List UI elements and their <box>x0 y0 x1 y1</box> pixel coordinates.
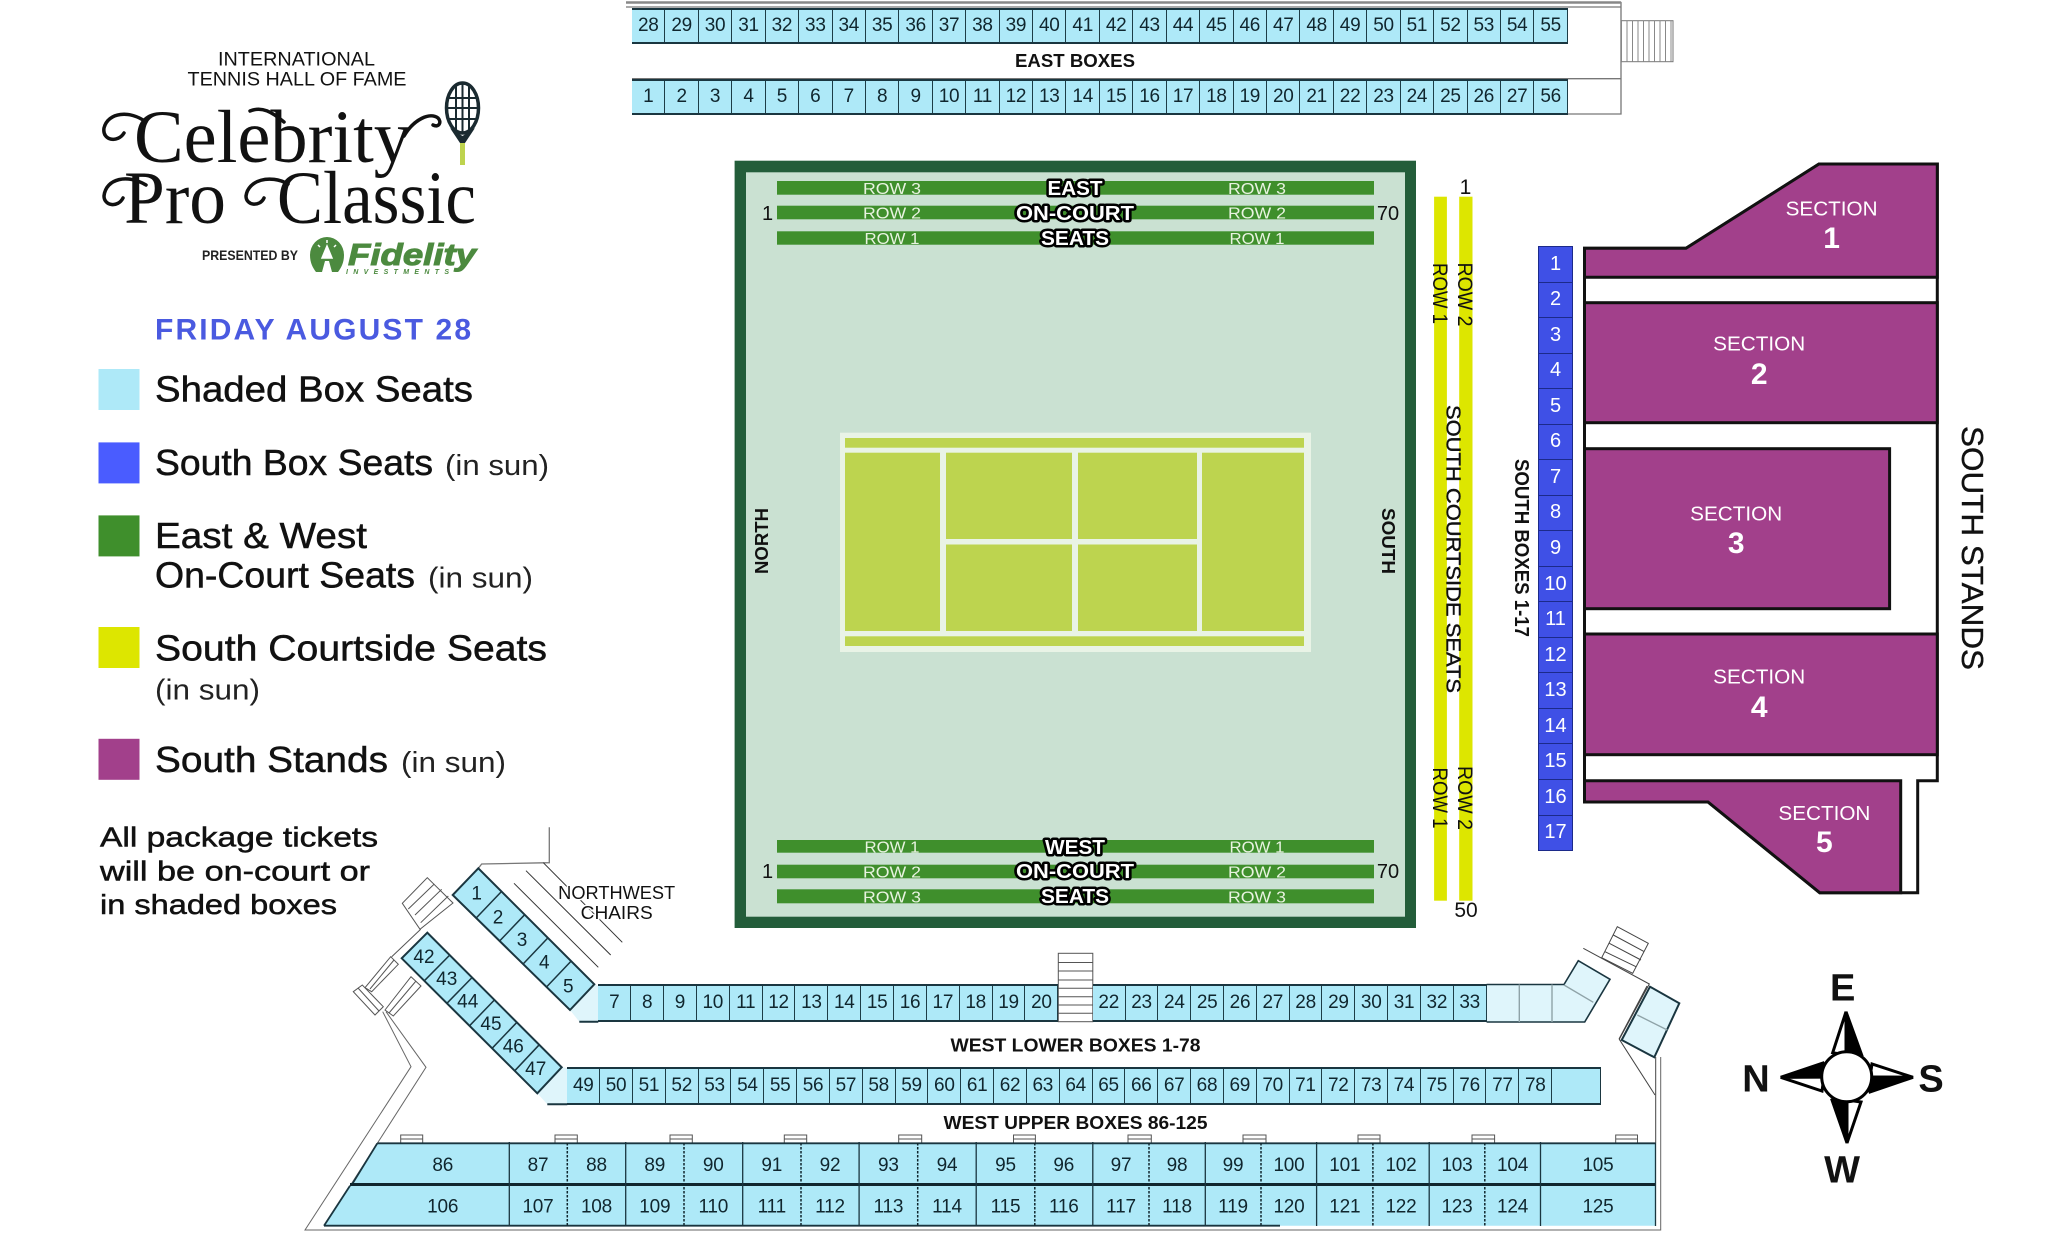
note: package tickets: All package tickets <box>100 822 378 853</box>
east boxes row 1-27 and 56: 4 <box>743 86 754 107</box>
west lower boxes 49-78: 60 <box>934 1075 955 1096</box>
east boxes row 1-27 and 56: 14 <box>1072 86 1093 107</box>
panel: south stands: 2 <box>1751 358 1768 391</box>
west upper boxes 86-125: 121 <box>1329 1196 1360 1218</box>
northwest chairs lines and label <box>478 827 675 967</box>
legend: south courtside seats: (in sun) <box>155 675 260 707</box>
diagonal boxes 42-47 <box>402 933 567 1104</box>
logo: presented by Fidelity <box>202 237 478 276</box>
west upper boxes 86-125: 92 <box>820 1155 840 1176</box>
east boxes row 1-27 and 56: 12 <box>1006 86 1026 107</box>
east boxes row 1-27 and 56: 11 <box>973 86 992 107</box>
south boxes column 1-17: 6 <box>1550 430 1561 452</box>
south boxes column 1-17: 17 <box>1544 821 1567 843</box>
south boxes column 1-17: 12 <box>1544 644 1567 666</box>
east boxes row 1-27 and 56: 25 <box>1440 86 1461 107</box>
west upper boxes 86-125: 125 <box>1582 1196 1614 1218</box>
east boxes row 1-27 and 56: 13 <box>1039 86 1060 107</box>
panel: south stands: 3 <box>1728 527 1745 560</box>
diagonal boxes 1-5: 5 <box>563 976 574 998</box>
west upper boxes 86-125: 105 <box>1582 1155 1614 1176</box>
west lower boxes 22-33: 22 <box>1098 992 1119 1013</box>
east boxes row 1-27 and 56: 8 <box>877 86 887 107</box>
west lower boxes 22-33: 25 <box>1197 992 1217 1013</box>
west upper boxes 86-125: 86 <box>432 1155 453 1176</box>
compass rose: N <box>1742 1059 1770 1101</box>
west lower boxes 7-20: 13 <box>801 992 822 1013</box>
label: west upper boxes: WEST UPPER BOXES 86-125 <box>944 1113 1208 1133</box>
south boxes column 1-17: 15 <box>1544 750 1567 772</box>
west upper boxes 86-125: 104 <box>1497 1155 1529 1176</box>
northwest chairs lines and label: CHAIRS <box>581 903 653 923</box>
west lower boxes 7-20: 10 <box>703 992 723 1013</box>
west lower boxes 49-78: 77 <box>1492 1075 1513 1096</box>
west lower boxes 49-78: 61 <box>967 1075 987 1096</box>
east boxes row 1-27 and 56: 56 <box>1540 86 1561 107</box>
east boxes row 28-55: 39 <box>1006 15 1026 36</box>
west upper boxes 86-125: 119 <box>1218 1196 1248 1218</box>
west upper boxes 86-125: 116 <box>1049 1196 1079 1218</box>
east boxes row 28-55: 28 <box>638 15 658 36</box>
west lower boxes 49-78: 65 <box>1098 1075 1119 1096</box>
west lower boxes 49-78 <box>567 1067 1552 1105</box>
east on-court rows: ROW 2 <box>863 206 921 223</box>
logo: presented by Fidelity: Fidelity <box>348 237 478 272</box>
panel: south courtside seats: ROW 2 <box>1453 766 1476 830</box>
logo: Celebrity Pro Classic: TENNIS HALL OF FAME <box>188 70 406 91</box>
logo: Celebrity Pro Classic: Classic <box>277 157 476 240</box>
compass rose: W <box>1824 1150 1860 1192</box>
west upper boxes 86-125: 115 <box>991 1196 1020 1218</box>
west lower boxes 49-78: 64 <box>1065 1075 1086 1096</box>
logo: presented by Fidelity: INVESTMENTS <box>346 269 449 276</box>
panel: south stands: 5 <box>1816 826 1833 859</box>
panel: south stands: SECTION <box>1778 803 1870 825</box>
west lower boxes 22-33: 31 <box>1394 992 1414 1013</box>
panel: south stands: 4 <box>1751 691 1768 724</box>
east boxes enclosure and stairs <box>626 2 1673 114</box>
west upper boxes 86-125: 117 <box>1106 1196 1136 1218</box>
west lower boxes 22-33: 33 <box>1459 992 1480 1013</box>
west upper boxes 86-125: 112 <box>815 1196 845 1218</box>
west upper boxes 86-125: 88 <box>586 1155 607 1176</box>
east boxes row 1-27 and 56: 20 <box>1273 86 1294 107</box>
panel: south stands: SECTION <box>1690 504 1782 526</box>
west upper boxes 86-125: 118 <box>1162 1196 1192 1218</box>
east on-court rows <box>762 178 1399 250</box>
east on-court rows: 1 <box>762 203 773 225</box>
east boxes row 28-55: 42 <box>1106 15 1126 36</box>
west upper boxes 86-125: 111 <box>758 1196 786 1218</box>
west lower boxes 49-78: 71 <box>1295 1075 1316 1096</box>
west upper boxes 86-125: 100 <box>1273 1155 1305 1176</box>
legend: south box seats <box>98 442 549 483</box>
west lower boxes 7-20: 16 <box>900 992 920 1013</box>
legend: south box seats: (in sun) <box>445 450 549 482</box>
south boxes column 1-17: 4 <box>1550 359 1561 381</box>
east boxes row 28-55: 36 <box>905 15 926 36</box>
legend: east and west on-court seats: (in sun) <box>428 563 533 595</box>
west upper boxes 86-125: 110 <box>698 1196 728 1218</box>
east boxes row 1-27 and 56: 10 <box>939 86 959 107</box>
west lower boxes 49-78: 63 <box>1033 1075 1053 1096</box>
west lower boxes 49-78: 59 <box>901 1075 922 1096</box>
east boxes row 28-55: 32 <box>772 15 792 36</box>
diagonal boxes 42-47: 45 <box>480 1014 502 1035</box>
label: north: NORTH <box>752 508 772 574</box>
west lower boxes 49-78: 57 <box>836 1075 856 1096</box>
diagonal boxes 42-47: 44 <box>457 992 479 1012</box>
west upper boxes 86-125: 96 <box>1053 1155 1074 1176</box>
northwest stairs and walkway <box>305 878 1661 1230</box>
west upper boxes 86-125: 103 <box>1441 1155 1473 1176</box>
east boxes row 28-55: 52 <box>1440 15 1461 36</box>
south boxes column 1-17: 5 <box>1550 395 1561 417</box>
west lower boxes 7-20: 19 <box>998 992 1019 1013</box>
west lower row end cap <box>1487 961 1610 1022</box>
east boxes row 28-55 <box>632 8 1568 44</box>
east boxes row 1-27 and 56: 21 <box>1306 86 1327 107</box>
west lower boxes 7-20: 18 <box>965 992 986 1013</box>
west lower boxes 49-78: 72 <box>1328 1075 1349 1096</box>
east end stairs and stub <box>1583 927 1679 1143</box>
east boxes row 28-55: 48 <box>1306 15 1327 36</box>
panel: south stands: SECTION <box>1713 666 1805 688</box>
south boxes column 1-17: 16 <box>1544 786 1567 808</box>
panel: south courtside seats: ROW 2 <box>1453 262 1476 326</box>
east boxes row 28-55: 47 <box>1273 15 1294 36</box>
east boxes row 28-55: 45 <box>1206 15 1227 36</box>
south boxes column 1-17: 11 <box>1545 608 1566 630</box>
south boxes column 1-17: 9 <box>1550 537 1561 559</box>
west lower boxes 49-78: 54 <box>737 1075 758 1096</box>
east boxes row 28-55: 44 <box>1173 15 1193 36</box>
east boxes row 1-27 and 56 <box>632 79 1568 115</box>
west upper boxes 86-125: 101 <box>1329 1155 1360 1176</box>
east boxes row 1-27 and 56: 5 <box>777 86 787 107</box>
west upper boxes 86-125: 95 <box>995 1155 1016 1176</box>
date heading: FRIDAY AUGUST 28 <box>155 313 471 346</box>
legend: south stands: South Stands <box>155 739 388 780</box>
west upper boxes 86-125: 97 <box>1111 1155 1131 1176</box>
west lower boxes 49-78: 56 <box>803 1075 823 1096</box>
east boxes row 1-27 and 56: 17 <box>1173 86 1193 107</box>
west lower boxes 49-78: 58 <box>868 1075 889 1096</box>
west lower boxes 49-78: 66 <box>1131 1075 1152 1096</box>
panel: south courtside seats: ROW 1 <box>1428 768 1451 828</box>
east boxes row 1-27 and 56: 19 <box>1240 86 1260 107</box>
east boxes row 1-27 and 56: 16 <box>1139 86 1160 107</box>
east boxes row 28-55: 37 <box>939 15 959 36</box>
east boxes row 28-55: 50 <box>1373 15 1394 36</box>
legend: south courtside seats: South Courtside Seats <box>155 628 547 669</box>
east on-court rows: ROW 3 <box>1228 181 1286 198</box>
east on-court rows: EAST <box>1048 178 1102 200</box>
logo: Celebrity Pro Classic: INTERNATIONAL <box>218 50 375 71</box>
east on-court rows: 70 <box>1377 203 1399 225</box>
west lower boxes 49-78: 76 <box>1459 1075 1480 1096</box>
east boxes row 1-27 and 56: 24 <box>1407 86 1427 107</box>
west upper boxes 86-125: 89 <box>644 1155 665 1176</box>
east on-court rows: ROW 1 <box>1230 231 1285 248</box>
south boxes column 1-17: 3 <box>1550 324 1561 346</box>
compass rose: E <box>1830 968 1855 1010</box>
east boxes row 1-27 and 56: 3 <box>710 86 720 107</box>
west lower boxes 49-78: 74 <box>1394 1075 1414 1096</box>
east on-court rows: ON-COURT <box>1016 203 1134 225</box>
west lower boxes 22-33 <box>1093 984 1487 1022</box>
west lower boxes 49-78: 55 <box>770 1075 790 1096</box>
west lower boxes 49-78: 69 <box>1230 1075 1250 1096</box>
label: east boxes: EAST BOXES <box>1015 51 1135 71</box>
east on-court rows: ROW 1 <box>864 231 920 248</box>
west upper boxes 86-125: 87 <box>528 1155 548 1176</box>
note: package tickets <box>99 822 378 920</box>
legend: south stands: (in sun) <box>401 747 506 779</box>
panel: south stands: SECTION <box>1713 334 1805 356</box>
east boxes row 28-55: 29 <box>671 15 692 36</box>
west lower boxes 49-78: 53 <box>704 1075 725 1096</box>
west on-court rows: WEST <box>1045 837 1105 859</box>
diagonal boxes 42-47: 46 <box>503 1036 524 1058</box>
east boxes row 28-55: 30 <box>705 15 725 36</box>
east boxes row 1-27 and 56: 9 <box>910 86 921 107</box>
west lower boxes 22-33: 24 <box>1164 992 1185 1013</box>
west upper boxes 86-125: 90 <box>703 1155 724 1176</box>
icon: tennis racket <box>446 83 479 165</box>
west lower boxes 7-20: 17 <box>933 992 953 1013</box>
label: south: SOUTH <box>1378 508 1398 574</box>
west lower boxes 7-20: 7 <box>609 992 619 1013</box>
east boxes row 28-55: 43 <box>1139 15 1160 36</box>
legend: east and west on-court seats: On-Court Seats <box>155 555 415 596</box>
east boxes row 1-27 and 56: 2 <box>676 86 687 107</box>
panel: south courtside seats: 1 <box>1460 176 1471 199</box>
west upper boxes 86-125: 93 <box>878 1155 899 1176</box>
panel: south courtside seats: ROW 1 <box>1428 263 1451 324</box>
step tabs above west upper boxes <box>401 1135 1638 1143</box>
west lower boxes 49-78: 68 <box>1197 1075 1217 1096</box>
west lower row blank end box <box>1552 1067 1601 1105</box>
west on-court rows: ON-COURT <box>1016 861 1134 883</box>
west on-court rows: ROW 2 <box>1228 864 1286 882</box>
panel: south stands: SECTION <box>1786 198 1878 220</box>
logo: Celebrity Pro Classic: Celebrity <box>134 96 411 179</box>
west upper boxes 86-125: 94 <box>937 1155 958 1176</box>
south boxes column 1-17: 13 <box>1544 679 1567 701</box>
northwest chairs lines and label: NORTHWEST <box>558 883 675 903</box>
west upper boxes 86-125 <box>324 1142 1656 1226</box>
east boxes row 28-55: 55 <box>1540 15 1561 36</box>
south boxes column 1-17: 1 <box>1550 253 1561 275</box>
west lower boxes 7-20: 12 <box>768 992 789 1013</box>
west lower boxes 7-20: 15 <box>867 992 887 1013</box>
west lower boxes 22-33: 30 <box>1361 992 1381 1013</box>
east boxes row 1-27 and 56: 27 <box>1507 86 1527 107</box>
west upper boxes 86-125: 91 <box>761 1155 782 1176</box>
south boxes column 1-17: 7 <box>1550 466 1561 488</box>
west upper boxes 86-125: 102 <box>1385 1155 1417 1176</box>
east boxes row 28-55: 41 <box>1072 15 1093 36</box>
west upper boxes 86-125: 98 <box>1167 1155 1187 1176</box>
west on-court rows: ROW 2 <box>863 864 921 882</box>
west lower boxes 7-20: 20 <box>1031 992 1052 1013</box>
east boxes row 1-27 and 56: 23 <box>1373 86 1394 107</box>
diagonal boxes 1-5 <box>453 868 598 1022</box>
east boxes row 28-55: 53 <box>1473 15 1494 36</box>
east boxes row 1-27 and 56: 7 <box>844 86 854 107</box>
logo: Celebrity Pro Classic: Pro <box>124 157 226 240</box>
west upper boxes 86-125: 109 <box>639 1196 670 1218</box>
west lower boxes 49-78: 62 <box>1000 1075 1020 1096</box>
label: west lower boxes: WEST LOWER BOXES 1-78 <box>950 1036 1200 1056</box>
diagonal boxes 42-47: 47 <box>525 1059 546 1080</box>
diagonal boxes 1-5: 1 <box>471 884 482 904</box>
west lower boxes 22-33: 23 <box>1131 992 1152 1013</box>
east boxes row 1-27 and 56: 26 <box>1473 86 1494 107</box>
west lower boxes 49-78: 75 <box>1426 1075 1447 1096</box>
west lower boxes 22-33: 26 <box>1230 992 1250 1013</box>
west upper boxes 86-125: 123 <box>1441 1196 1473 1218</box>
west lower boxes 49-78: 50 <box>606 1075 626 1096</box>
west on-court rows <box>762 837 1399 908</box>
east boxes row 28-55: 51 <box>1407 15 1427 36</box>
east boxes row 28-55: 54 <box>1507 15 1527 36</box>
diagonal boxes 42-47: 42 <box>413 947 435 968</box>
diagonal boxes 1-5: 3 <box>517 930 527 951</box>
legend: east and west on-court seats <box>98 515 533 596</box>
east boxes row 1-27 and 56: 6 <box>810 86 820 107</box>
panel: south stands <box>1584 164 1937 893</box>
west lower boxes 49-78: 67 <box>1164 1075 1184 1096</box>
label: south stands: SOUTH STANDS <box>1955 426 1990 670</box>
panel: south courtside seats: 50 <box>1454 899 1478 922</box>
west lower boxes 7-20: 9 <box>675 992 685 1013</box>
west on-court rows: ROW 1 <box>1230 840 1285 856</box>
west lower boxes 49-78: 52 <box>671 1075 692 1096</box>
west on-court rows: ROW 3 <box>1228 890 1286 906</box>
tennis court <box>840 433 1311 652</box>
east on-court rows: ROW 2 <box>1228 206 1286 223</box>
west upper boxes 86-125: 124 <box>1497 1196 1529 1218</box>
compass rose <box>1742 968 1944 1192</box>
west on-court rows: ROW 1 <box>864 840 920 856</box>
compass rose: S <box>1918 1059 1944 1101</box>
east on-court rows: ROW 3 <box>863 181 921 198</box>
east boxes row 1-27 and 56: 15 <box>1106 86 1126 107</box>
label: south boxes 1-17: SOUTH BOXES 1-17 <box>1510 459 1532 637</box>
west lower boxes 49-78: 70 <box>1262 1075 1283 1096</box>
west lower boxes 49-78: 51 <box>639 1075 659 1096</box>
west lower boxes 7-20: 8 <box>642 992 652 1013</box>
west lower boxes 22-33: 28 <box>1295 992 1316 1013</box>
west upper boxes 86-125: 108 <box>581 1196 612 1218</box>
east boxes row 1-27 and 56: 18 <box>1206 86 1227 107</box>
west upper boxes 86-125: 113 <box>874 1196 903 1218</box>
legend: east and west on-court seats: East & West <box>155 515 367 556</box>
note: package tickets: will be on-court or <box>99 855 370 886</box>
east boxes row 28-55: 35 <box>872 15 892 36</box>
legend: south box seats: South Box Seats <box>155 442 433 483</box>
west on-court rows: SEATS <box>1041 886 1109 908</box>
diagonal boxes 42-47: 43 <box>436 969 457 990</box>
east boxes row 28-55: 40 <box>1039 15 1060 36</box>
panel: south stands: 1 <box>1823 222 1840 255</box>
west upper boxes 86-125: 107 <box>522 1196 554 1218</box>
south boxes column 1-17: 14 <box>1544 715 1567 737</box>
west upper boxes 86-125: 120 <box>1273 1196 1305 1218</box>
west on-court rows: ROW 3 <box>863 890 921 906</box>
west lower boxes 7-20: 11 <box>736 992 755 1013</box>
legend: shaded box seats: Shaded Box Seats <box>155 369 473 410</box>
east boxes row 28-55: 38 <box>972 15 993 36</box>
west upper boxes 86-125: 114 <box>932 1196 962 1218</box>
south boxes column 1-17 <box>1538 246 1573 851</box>
west lower boxes 22-33: 32 <box>1427 992 1447 1013</box>
west lower boxes 7-20: 14 <box>834 992 855 1013</box>
legend: south courtside seats <box>98 627 547 707</box>
east boxes row 28-55: 34 <box>838 15 859 36</box>
east boxes row 28-55: 33 <box>805 15 826 36</box>
south boxes column 1-17: 8 <box>1550 501 1561 523</box>
south boxes column 1-17: 10 <box>1544 573 1567 595</box>
west lower boxes 49-78: 78 <box>1525 1075 1546 1096</box>
west upper boxes 86-125: 122 <box>1385 1196 1417 1218</box>
center aisle stairs <box>1058 953 1093 1022</box>
west lower boxes 49-78: 49 <box>573 1075 593 1096</box>
west upper boxes 86-125: 106 <box>427 1196 458 1218</box>
east boxes row 28-55: 46 <box>1240 15 1260 36</box>
east on-court rows: SEATS <box>1041 228 1109 250</box>
panel: center court <box>735 161 1416 928</box>
west on-court rows: 70 <box>1377 861 1399 883</box>
west lower boxes 22-33: 29 <box>1328 992 1349 1013</box>
note: package tickets: in shaded boxes <box>100 889 337 920</box>
east boxes row 1-27 and 56: 22 <box>1340 86 1360 107</box>
east boxes row 1-27 and 56: 1 <box>643 86 653 107</box>
legend: south stands <box>98 739 506 780</box>
west lower boxes 7-20 <box>598 984 1058 1022</box>
south boxes column 1-17: 2 <box>1550 288 1561 310</box>
west upper boxes 86-125: 99 <box>1223 1155 1243 1176</box>
west on-court rows: 1 <box>762 861 773 883</box>
west lower boxes 22-33: 27 <box>1262 992 1283 1013</box>
logo: presented by Fidelity: PRESENTED BY <box>202 247 299 263</box>
logo: Celebrity Pro Classic <box>104 50 476 240</box>
diagonal boxes 1-5: 4 <box>539 952 550 974</box>
east boxes row 28-55: 31 <box>738 15 759 36</box>
panel: south courtside seats <box>1428 176 1478 922</box>
diagonal boxes 1-5: 2 <box>493 908 503 928</box>
east boxes row 28-55: 49 <box>1340 15 1360 36</box>
panel: south courtside seats: SOUTH COURTSIDE SEATS <box>1442 405 1464 693</box>
west lower boxes 49-78: 73 <box>1361 1075 1381 1096</box>
